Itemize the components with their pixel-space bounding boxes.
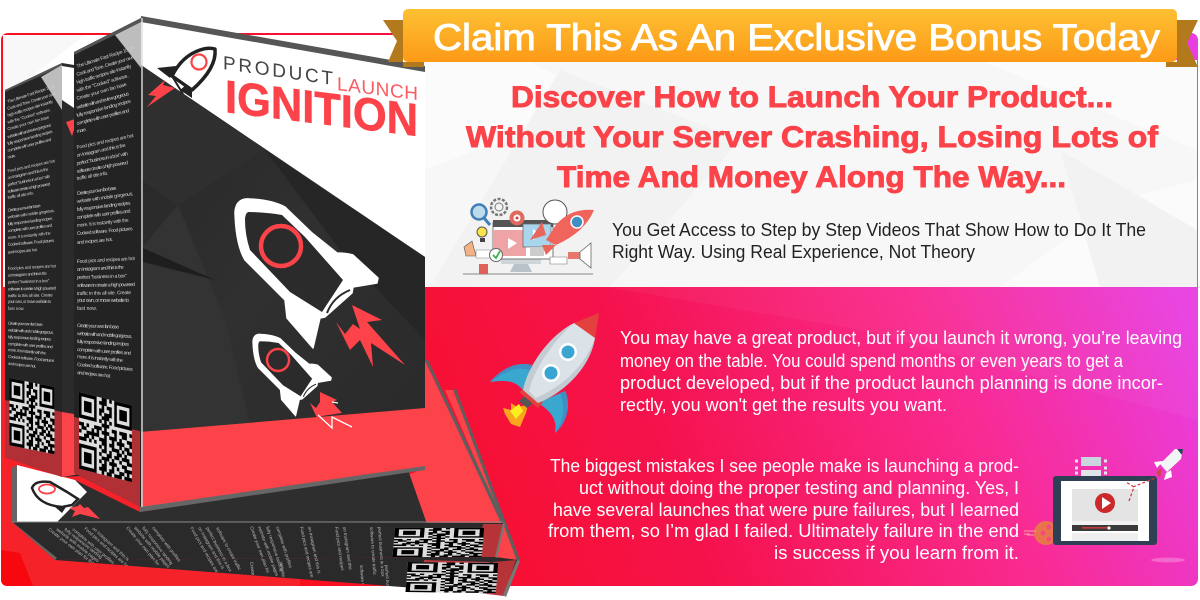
paragraph one: money on the table. You could spend months or even years to get a — [620, 351, 1124, 371]
lying box spine text: software to create — [359, 565, 367, 600]
lying box spine text: software to create traffic — [369, 527, 377, 576]
logo wordmark: LAUNCH — [337, 74, 418, 105]
headline: Time And Money Along The Way... — [557, 161, 1066, 194]
main box side text: fast now. — [77, 306, 97, 312]
main box side text: traffic all site info. — [76, 171, 109, 182]
subheading text: You Get Access to Step by Step Videos That Show How to Do It The — [612, 220, 1146, 240]
lower box QR code — [405, 562, 498, 593]
main box side text: complete with user profiles and — [77, 208, 131, 221]
paragraph two — [548, 456, 1019, 563]
subheading text: Right Way. Using Real Experience, Not Theory — [612, 242, 975, 262]
lying box spine text: Create your own — [249, 561, 259, 595]
lying box spine text — [48, 526, 390, 586]
paragraph one — [620, 328, 1182, 415]
main box side text: fully responsive landing recipes — [77, 200, 131, 213]
upper lying box QR code — [392, 528, 484, 557]
main product box — [74, 16, 425, 512]
lying box spine text: on Instagram and this is — [307, 526, 322, 575]
lying box spine text: Create your own plan for — [125, 525, 161, 567]
main box QR code — [79, 392, 132, 482]
main box side text: high-traffic recipes site instantly — [76, 63, 133, 86]
main box side text: website with and mobile gorgeous, — [77, 331, 132, 340]
lying box spine text: software to create traffic — [215, 526, 242, 571]
lying box spine text: Food pics and recipes are — [299, 526, 315, 578]
lying box spine text: on Instagram and this — [342, 526, 353, 571]
lying box spine text: complete with user profiles — [71, 527, 116, 565]
lower lying box — [55, 389, 520, 597]
lying box spine text: Create your own plan for — [249, 526, 271, 574]
main box side text: Create your own fan base — [76, 185, 117, 197]
main box side text: Create your own fan base — [76, 82, 128, 102]
icon: marketing monitor — [463, 199, 594, 274]
paragraph one: rectly, you won't get the results you want. — [620, 395, 947, 415]
main box side text: and recipes are hot. — [77, 237, 113, 246]
paragraph two: from them, so I’m glad I failed. Ultimately failure in the end — [548, 521, 1019, 541]
headline: Discover How to Launch Your Product... — [511, 81, 1113, 114]
paragraph one: product developed, but if the product launch planning is done incor- — [620, 373, 1163, 393]
lying box spine text: on Instagram and this is — [197, 526, 226, 571]
lying box spine text: complete with profiles — [151, 526, 182, 563]
main box side text: fully responsive landing recipes — [77, 339, 130, 348]
main box side text: perfect "business in a box" — [77, 273, 127, 281]
logo rocket — [147, 48, 215, 107]
large rocket — [235, 199, 378, 348]
large rocket flame — [336, 305, 405, 367]
main box side text: on Instagram and this is the — [77, 265, 124, 273]
main box side text: The Ultimate Fast Recipe 10 20 — [76, 46, 135, 70]
main box side text: on Instagram and this is the — [76, 143, 127, 159]
main box side text: Create your own fan base — [77, 323, 119, 330]
main box side text: Food pics and recipes are hot — [76, 133, 135, 151]
lying box spine text: website with mobile pages — [55, 527, 100, 564]
main box side text: perfect "business in a box" with — [76, 151, 129, 167]
lying box spine text: Create your own plan for this — [47, 527, 96, 567]
main box side text: and recipes are hot. — [77, 370, 111, 380]
lying box spine text: Food pics and recipes are hot — [83, 526, 131, 570]
main box side text: complete with user profiles and — [77, 347, 131, 357]
headline — [466, 81, 1159, 194]
rear product box — [5, 63, 80, 477]
main box side text: traffic to this all site. Create — [77, 290, 131, 297]
lying box spine text: perfect business — [384, 565, 391, 599]
lying box spine text: complete with profiles — [275, 526, 293, 569]
paragraph two: is success if you learn from it. — [774, 543, 1019, 563]
main box side text: Cooked software. Food pictures — [77, 362, 134, 373]
lying box spine text: website with mobile pages — [257, 526, 280, 577]
main box side text: Cook and Tone. Create your own — [76, 55, 135, 78]
side face — [74, 18, 141, 507]
main box side text: your own, or move website to — [77, 298, 129, 304]
lying box logo rocket — [32, 482, 100, 519]
main box side text: Food pics and recipes are hot — [77, 256, 136, 265]
main box side text: Cooked software. Food pictures — [77, 226, 133, 237]
ribbon banner — [383, 9, 1198, 67]
lying box spine text: fully responsive landing — [63, 527, 104, 560]
main box side text: more. It is instantly with the — [77, 218, 129, 229]
main box side text: more. — [76, 127, 87, 135]
headline: Without Your Server Crashing, Losing Lots of — [466, 121, 1159, 154]
white upper panel — [3, 35, 1197, 287]
subheading text — [612, 220, 1146, 262]
logo wordmark: PRODUCT — [223, 53, 333, 90]
lying box spine text: fully responsive landing — [265, 526, 284, 572]
front face — [140, 16, 425, 512]
paragraph one: You may have a great product, but if you launch it wrong, you’re leaving — [620, 328, 1182, 348]
lying box spine text: website with mobile pages — [133, 525, 171, 569]
icon: video tablet — [1024, 449, 1185, 562]
main box side text: website with mobile gorgeous, — [76, 191, 134, 205]
lying box spine text: perfect business in a box — [377, 527, 386, 577]
paragraph two: The biggest mistakes I see people make is launching a prod- — [550, 456, 1019, 476]
lying box spine text: website with — [279, 561, 287, 587]
small rocket — [253, 334, 331, 416]
main box side text: fully responsive landing recipes — [76, 99, 132, 119]
paragraph two: uct without doing the proper testing and planning. Yes, I — [579, 478, 1019, 498]
paragraph two: have several launches that were pure failures, but I learned — [553, 500, 1019, 520]
logo wordmark: IGNITION — [225, 70, 418, 146]
banner title: Claim This As An Exclusive Bonus Today — [433, 17, 1161, 58]
main box side text: software create a high powered — [76, 160, 129, 175]
lying box spine text: fully responsive landing — [141, 526, 174, 566]
icon: flying rocket — [490, 313, 599, 433]
main box side text: more. It is instantly with the — [77, 354, 123, 364]
rear box QR code — [10, 378, 54, 454]
upper lying box — [12, 360, 505, 600]
main box side text: with the "Cooked" software. — [76, 73, 129, 94]
small rocket flame — [310, 392, 352, 428]
main box side text: complete with user profiles and — [76, 108, 130, 127]
main box side text: software to create a high powered — [77, 282, 135, 289]
lying box spine text: Food pics and recipes — [334, 526, 345, 571]
main box side text: website with and review gorgeous — [76, 91, 130, 111]
rear box side text — [7, 83, 57, 369]
main box side text — [76, 46, 136, 380]
lying box spine text: Food pics and recipes are — [189, 526, 220, 574]
lying box spine text: perfect business in a box — [205, 526, 233, 573]
lying box spine text: on Instagram and this is — [91, 526, 131, 562]
